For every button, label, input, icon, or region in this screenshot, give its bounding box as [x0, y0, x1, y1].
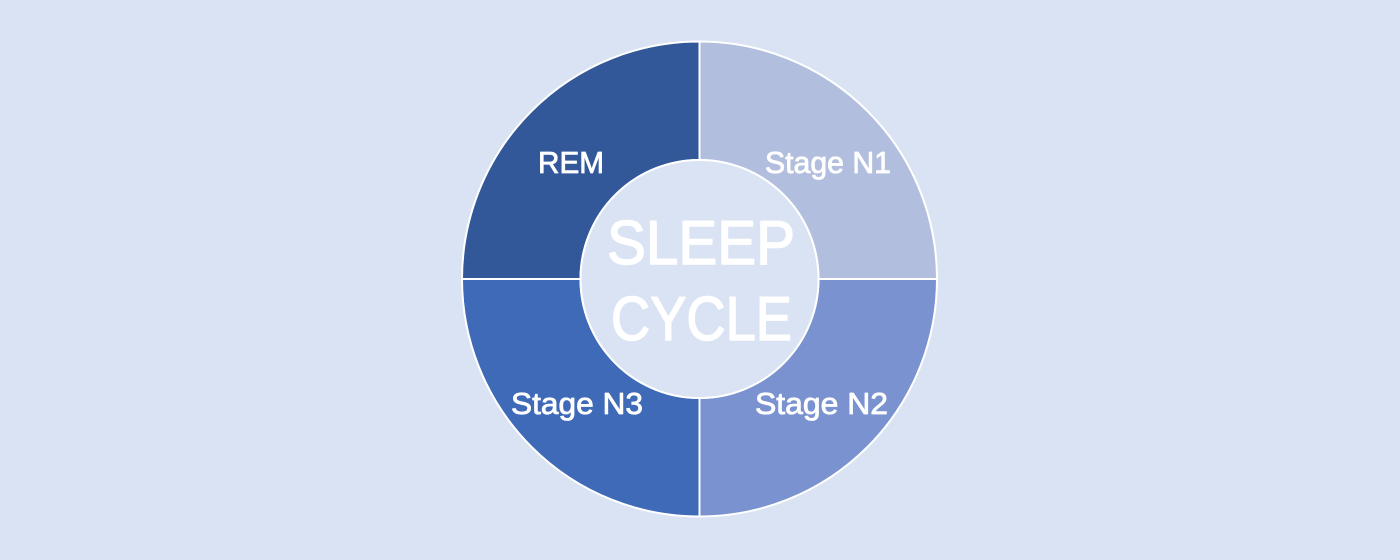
donut segment: Stage N1: Stage N1 — [765, 145, 891, 180]
donut segment: Stage N2 — [700, 279, 937, 516]
center title: SLEEP — [607, 209, 795, 278]
donut segment: Stage N2: Stage N2 — [755, 386, 888, 421]
donut segment: Stage N3: Stage N3 — [511, 386, 643, 421]
donut segment: Stage N1 — [700, 42, 937, 279]
donut segment: REM: REM — [538, 145, 604, 180]
center title: CYCLE — [611, 285, 792, 354]
donut segment: REM — [462, 42, 700, 279]
center title — [580, 160, 818, 398]
donut segment: Stage N3 — [462, 279, 700, 516]
